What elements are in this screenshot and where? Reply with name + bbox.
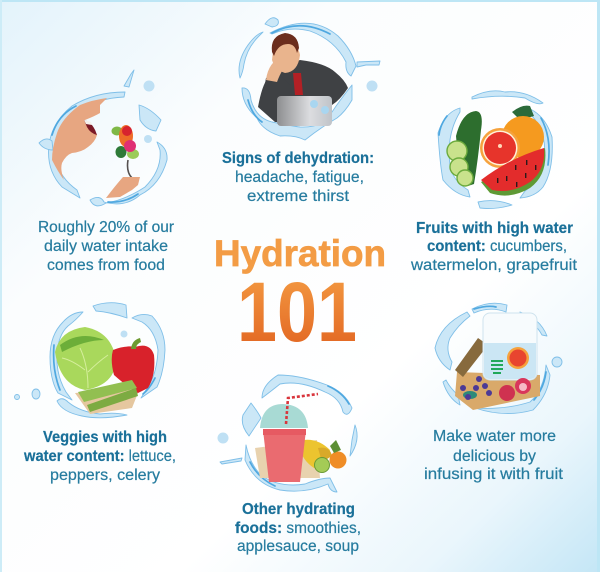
text: veggies: Veggies with high <box>43 429 167 446</box>
text: roughly 20%: daily water intake <box>44 238 168 255</box>
icon: celery <box>78 380 138 412</box>
text: fruits: watermelon, grapefruit <box>410 257 578 274</box>
panel: other hydrating foods <box>218 375 361 555</box>
text: infuse water <box>424 428 564 483</box>
text: roughly 20%: comes from food <box>47 257 165 274</box>
text: infuse water: Make water more <box>433 428 556 445</box>
text: other foods: foods: smoothies, <box>235 520 361 537</box>
icon: strawberries <box>499 378 531 401</box>
icon: red pepper <box>112 338 154 393</box>
text: other foods: applesauce, soup <box>237 538 359 555</box>
panel: food water intake <box>38 70 174 274</box>
text: veggies: water content: lettuce, <box>23 448 176 465</box>
text: infuse water: infusing it with fruit <box>424 466 564 483</box>
text: infuse water: delicious by <box>453 448 536 465</box>
icon: grapefruit <box>480 128 520 168</box>
panel: infused water <box>424 303 564 483</box>
panel: fruits <box>410 91 578 274</box>
text: roughly 20% <box>38 219 174 274</box>
icon: fruit pile <box>300 440 346 472</box>
icon: water ring with jar <box>435 303 562 414</box>
text: other foods: Other hydrating <box>242 501 355 518</box>
icon: tan backdrop <box>255 440 320 478</box>
icon: lettuce <box>55 327 116 390</box>
icon: cucumber <box>447 111 482 186</box>
text: fruits: Fruits with high water <box>416 220 573 237</box>
icon: water ring with mouth <box>39 70 167 206</box>
icon: berries <box>460 376 492 400</box>
icon: celery base <box>75 388 140 414</box>
panel: veggies <box>14 303 176 484</box>
icon: water ring with fruit <box>438 91 552 209</box>
icon: cutting board <box>455 372 540 410</box>
text: signs of dehydration: extreme thirst <box>247 188 350 205</box>
icon: smoothie cup <box>260 394 318 482</box>
icon: watermelon <box>481 148 545 196</box>
text: signs of dehydration <box>222 150 374 205</box>
text: veggies <box>23 429 176 484</box>
title: Hydration 101 <box>214 233 386 359</box>
text: fruits: content: cucumbers, <box>427 238 567 255</box>
panel: dehydration <box>222 18 380 205</box>
icon: wooden spoon <box>455 338 488 377</box>
heading: Hydration: Hydration <box>214 233 386 274</box>
heading: 101: 101 <box>237 265 357 359</box>
text: signs of dehydration: headache, fatigue, <box>235 169 364 186</box>
icon: stressed man at laptop <box>258 33 348 126</box>
text: signs of dehydration: Signs of dehydration: <box>222 150 374 167</box>
icon: face eating <box>52 98 107 180</box>
icon: orange <box>502 106 544 158</box>
text: roughly 20%: Roughly 20% of our <box>38 219 174 236</box>
text: other foods <box>235 501 361 555</box>
icon: water jar <box>483 313 537 380</box>
text: veggies: peppers, celery <box>50 467 160 484</box>
icon: water ring with vegetables <box>14 303 165 418</box>
text: fruits <box>410 220 578 274</box>
icon: water ring around stressed man <box>239 18 380 140</box>
icon: hand holding food <box>106 125 140 198</box>
icon: water ring with smoothie <box>218 375 357 492</box>
